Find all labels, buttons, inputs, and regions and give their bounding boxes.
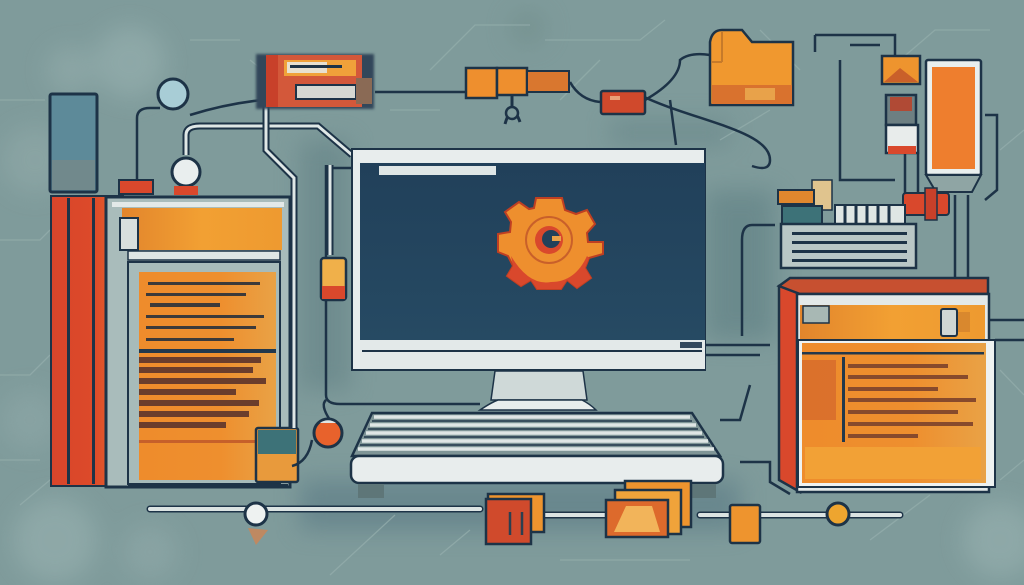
small orange square bbox=[730, 505, 760, 543]
right server front bbox=[797, 294, 989, 492]
monitor stand bbox=[491, 371, 587, 400]
connector wires bbox=[137, 35, 1024, 494]
central monitor bbox=[352, 149, 705, 410]
monitor screen bbox=[360, 163, 705, 340]
node: blue circle bbox=[158, 79, 188, 109]
monitor chin bbox=[360, 340, 705, 369]
server side panel bbox=[51, 196, 123, 486]
right server document bbox=[798, 340, 995, 487]
top center connector bbox=[466, 68, 569, 124]
left server tower bbox=[50, 94, 298, 487]
server top block bbox=[50, 94, 97, 192]
server badge bbox=[256, 428, 298, 482]
top left card bbox=[256, 54, 374, 109]
small orange chip bbox=[882, 56, 920, 84]
tall orange panel bbox=[926, 60, 981, 192]
right server bbox=[779, 278, 995, 492]
small red connector bbox=[601, 91, 645, 114]
double outlined wires bbox=[186, 105, 352, 428]
bottom bus line bbox=[150, 509, 900, 515]
window title bar bbox=[379, 166, 496, 175]
red valve bbox=[903, 188, 949, 220]
icon: red mug block bbox=[486, 494, 544, 544]
folder icon bbox=[710, 30, 793, 105]
machine block above right server bbox=[778, 180, 916, 268]
vertical plug bbox=[886, 95, 918, 154]
server front panel bbox=[106, 197, 290, 487]
node: bottom white circle bbox=[245, 503, 268, 545]
side connector orange tag bbox=[321, 258, 346, 300]
node: white circle with red base bbox=[119, 158, 200, 195]
right server side bbox=[779, 280, 800, 492]
monitor bezel bbox=[352, 149, 705, 370]
node: bottom orange circle bbox=[827, 503, 849, 525]
icon: gear bbox=[498, 198, 603, 289]
right server top bbox=[779, 278, 988, 294]
node: orange circle bbox=[314, 419, 342, 447]
server document bbox=[128, 262, 280, 484]
icon: stacked folders bbox=[606, 481, 691, 537]
keyboard bbox=[351, 413, 723, 498]
